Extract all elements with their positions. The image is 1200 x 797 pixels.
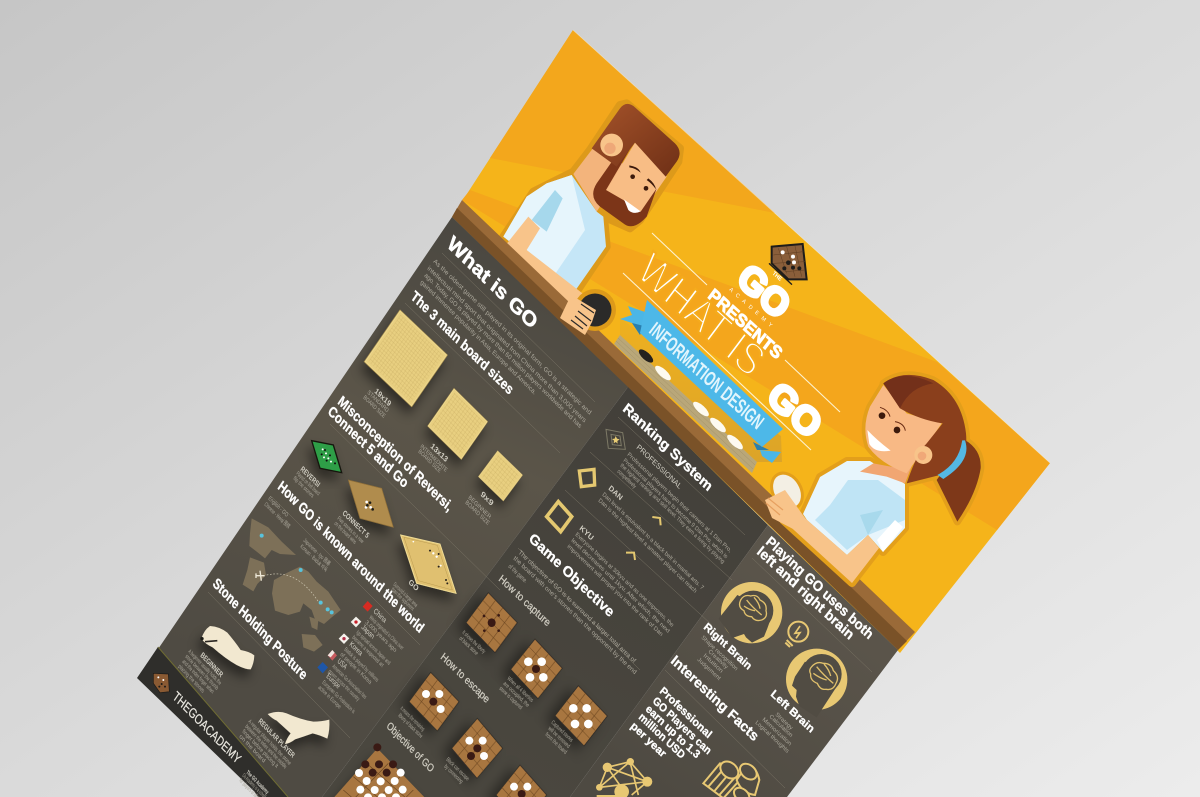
board descriptions: flip the stones	[292, 476, 315, 500]
woman shirt	[803, 461, 905, 555]
escape board 3	[496, 765, 547, 797]
posture labels: placing the stones	[177, 664, 205, 695]
country list: 3,000 years ago	[364, 620, 397, 654]
19x19 board	[364, 310, 447, 407]
map language labels: English - GO	[267, 496, 289, 519]
how go is known heading: How GO is known around the world	[275, 477, 427, 636]
board sizes heading: The 3 main board sizes	[408, 287, 517, 398]
country list: Igo spread across Japan and	[355, 630, 391, 667]
map language labels: Korean - Baduk 바둑	[299, 542, 329, 574]
the: THE	[771, 271, 783, 283]
game objective paragraph: of the game.	[507, 563, 528, 585]
dan icon	[579, 469, 595, 487]
what is go paragraph: intellectual mind sport that originated from China more than 3,000 years	[426, 265, 587, 424]
woman ear	[914, 446, 932, 464]
board descriptions: Five stones in a row	[336, 516, 365, 546]
9x9 board	[478, 451, 523, 501]
black stone and man's hand	[560, 289, 616, 335]
game objective paragraph: The objective of GO is to surround a larger total area of	[517, 549, 637, 665]
posture labels: stone between the thumb	[184, 654, 219, 692]
brain icons	[719, 582, 847, 717]
ranking text: Dan level is equivalent to a black belt in martial arts. 7	[601, 492, 704, 592]
ranking text: DAN	[607, 483, 624, 502]
reversi board	[312, 441, 342, 473]
how to capture heading: How to capture	[496, 574, 552, 629]
mini board captions: liberty of black stone	[397, 713, 423, 740]
man eyes and brows	[629, 165, 656, 191]
ranking text: KYU	[578, 523, 595, 542]
misconception heading: Misconception of Reversi,	[335, 392, 456, 515]
playing go heading: left and right brain	[754, 543, 858, 643]
playing go heading: Playing GO uses both	[763, 533, 877, 642]
mini board captions: It shows the liberty	[461, 630, 486, 655]
woman neck	[860, 453, 917, 483]
footer logo	[153, 673, 169, 693]
board labels: STANDARD	[366, 390, 389, 414]
board descriptions: than the opponent	[390, 587, 415, 613]
board labels: INTERMEDIATE	[419, 444, 448, 474]
brain labels	[696, 621, 817, 755]
interesting fact text: million USD	[636, 711, 687, 762]
board labels: 13x13	[429, 441, 450, 464]
mini board captions: Black can escape	[445, 757, 470, 783]
regular player hand	[268, 712, 329, 744]
board labels: BOARD SIZE	[464, 500, 490, 527]
brain labels: Shape recognition	[700, 635, 739, 672]
banner right tail	[760, 450, 781, 463]
posture hands	[200, 626, 329, 744]
world map	[243, 518, 373, 673]
ranking text	[566, 442, 733, 638]
panel: footer	[137, 647, 288, 797]
title rules	[623, 233, 840, 450]
what is go paragraph: As the oldest game still played in its original form, GO is a strategic and	[432, 258, 593, 417]
reversi, connect 5 and go boards	[312, 441, 456, 593]
posture labels: REGULAR PLAYER	[257, 716, 297, 760]
board labels: 19x19	[373, 386, 393, 408]
objective of go board	[320, 743, 440, 797]
man neck	[573, 143, 627, 212]
woman hair band	[940, 442, 965, 477]
interesting facts heading: Interesting Facts	[668, 652, 762, 744]
posture labels: A beginner usually holds the	[187, 649, 222, 687]
interesting fact text: per year	[628, 720, 669, 761]
title block	[623, 233, 840, 450]
banner: information design	[620, 300, 783, 463]
country list: Europe	[325, 671, 342, 691]
ranking text: improvement will propel you into the rank of Dan	[566, 544, 664, 638]
country list: became a respected art	[351, 635, 384, 669]
ranking text: Dan is the highest level a amateur player can reach	[597, 498, 698, 595]
stones on board	[637, 347, 745, 452]
woman halo	[783, 375, 981, 583]
posture labels: A regular player holds the stone	[247, 719, 292, 767]
panel: right column	[570, 525, 898, 797]
how to escape heading: How to escape	[438, 651, 492, 706]
what is go paragraph: gained immense popularity in Asia, Europe and America.	[419, 279, 537, 397]
brain labels: Intuition	[702, 653, 724, 675]
brain labels: Judgement	[696, 657, 722, 682]
interesting fact text: earn up to 1.3	[643, 703, 702, 761]
board labels: BOARD SIZE	[362, 395, 386, 420]
country list: Japan	[360, 622, 376, 641]
footer brand	[153, 673, 270, 797]
country list: grown across the country	[327, 669, 360, 703]
country list: China	[372, 606, 389, 625]
go: GO	[760, 374, 829, 447]
network icon	[596, 758, 652, 797]
mini board captions: will be removed	[546, 725, 571, 750]
map language labels	[263, 496, 332, 574]
capture board 1	[466, 593, 517, 653]
mini board captions: are occupied, the	[502, 681, 530, 709]
man shirt	[503, 175, 606, 293]
mini board captions	[397, 630, 574, 785]
man hair	[592, 104, 680, 177]
posture labels: finger before placing it	[241, 729, 279, 770]
panel: middle column	[322, 387, 768, 797]
board labels: 9x9	[479, 489, 495, 508]
country list: Baduk is played by millions	[343, 647, 379, 684]
game objective paragraph: the board with one's stones than the opponent by the end	[512, 555, 638, 677]
posture labels: BEGINNER	[199, 650, 225, 680]
board descriptions	[292, 464, 421, 613]
mini board captions: When all 4 liberties	[506, 676, 534, 704]
country list: European Go Federation is	[321, 680, 356, 715]
board sizes boards	[364, 310, 523, 501]
board descriptions: REVERSI	[299, 464, 322, 489]
board labels: BOARD SIZE	[417, 449, 442, 475]
mini board captions: from the board	[544, 732, 568, 756]
connect 5 board	[348, 480, 393, 527]
mini board captions: by connecting	[443, 764, 464, 785]
stone holding posture heading: Stone Holding Posture	[210, 574, 310, 683]
board on table and back panel	[614, 318, 782, 473]
ranking text: level decreases until 1kyu. After which, the next	[570, 538, 671, 635]
posture labels: between the index and the middle	[244, 724, 287, 771]
board descriptions: CONNECT 5	[341, 508, 371, 540]
right brain icon	[719, 582, 782, 643]
man beard	[593, 143, 657, 226]
mini board captions: It means the remaining	[399, 706, 425, 733]
go academy: GO	[730, 256, 798, 327]
map route	[267, 574, 318, 602]
chevrons	[626, 517, 661, 560]
panel: left column	[137, 217, 628, 797]
country list: American Go Association has	[331, 664, 367, 701]
footer note	[238, 770, 270, 797]
posture labels	[177, 649, 297, 771]
brain labels: Calculation	[768, 714, 793, 739]
escape board 1	[409, 672, 459, 731]
interesting fact text	[628, 685, 714, 762]
ranking system heading: Ranking System	[620, 399, 716, 494]
white stone and woman's hand	[765, 468, 809, 530]
what is: WHAT IS	[629, 244, 774, 387]
brain labels: Left Brain	[768, 688, 817, 736]
woman smile	[867, 430, 891, 451]
map markers	[260, 534, 334, 614]
man arm	[502, 217, 587, 313]
kyu icon	[547, 502, 572, 532]
ranking text: Professional players have to become 9 Dan Pro, which is	[622, 458, 728, 560]
coins icon	[703, 758, 760, 797]
capture board 2	[511, 639, 562, 699]
objective of go heading: Objective of GO	[384, 720, 436, 775]
poster top edge highlight	[573, 30, 1050, 463]
board descriptions: Surround a larger area	[392, 582, 418, 609]
man ear	[600, 134, 623, 156]
what is go paragraph: ago. Today, GO is played by more than 60 million players worldwide and has	[423, 272, 583, 430]
ranking text: Professional players begin their careers at 1 Dan Pro,	[626, 452, 733, 555]
brain labels: Strategy	[774, 712, 794, 732]
country list: active in Europe	[317, 685, 342, 711]
woman face	[865, 385, 942, 473]
posture labels: on the board	[238, 734, 266, 765]
woman ponytail	[937, 440, 981, 522]
man face	[607, 143, 667, 215]
woman hair	[883, 375, 966, 483]
plane icon	[256, 571, 265, 581]
presents: PRESENTS	[705, 285, 786, 363]
ranking text: the highest ranking and skill level. They earn a living by playing	[619, 463, 725, 565]
banner text: INFORMATION DESIGN	[645, 318, 767, 434]
mini board captions: Captured stones	[550, 720, 574, 744]
escape board 2	[452, 718, 503, 778]
bulb icon	[785, 622, 808, 647]
country list: of people in Korea	[339, 652, 373, 687]
board descriptions: Played on 8x8 board	[295, 471, 320, 497]
13x13 board	[428, 388, 488, 459]
board descriptions: on the board wins	[333, 521, 357, 546]
footer wordmark: THEGOACADEMY	[170, 688, 244, 767]
country list: Weiqi originated in China over	[368, 615, 404, 652]
ranking text: Everyone begins at 30kyu and as one improves, the	[574, 532, 675, 629]
ranking icons	[547, 429, 661, 560]
brain labels: Creativity	[707, 649, 729, 671]
panel: yellow header	[452, 30, 1050, 653]
professional icon	[606, 429, 625, 449]
woman eyes	[879, 407, 905, 433]
wood table strip	[452, 200, 915, 650]
board labels	[362, 386, 495, 527]
map language labels: Japanese - Igo 囲碁	[302, 536, 332, 568]
man illustration	[502, 103, 680, 313]
academy: ACADEMY	[728, 287, 773, 329]
game objective heading: Game Objective	[526, 529, 618, 620]
misconception heading: Connect 5 and Go	[325, 402, 411, 491]
woman arm	[783, 508, 879, 583]
interesting fact text: GO Players can	[650, 695, 714, 758]
country list	[317, 606, 404, 715]
beginner hand	[200, 626, 254, 669]
left brain icon	[786, 649, 847, 717]
posture labels: and the index finger when	[181, 659, 215, 696]
ranking text: competitively	[616, 469, 637, 490]
country list: USA	[336, 656, 349, 671]
capture board 3	[555, 686, 607, 746]
man smile	[624, 199, 641, 213]
board descriptions: GO	[407, 577, 421, 593]
ranking text: PROFESSIONAL	[635, 442, 684, 491]
brain labels: Right Brain	[701, 621, 754, 673]
mini board captions: stone is captured	[498, 686, 523, 711]
flags	[317, 601, 373, 673]
banner left tail	[620, 306, 645, 335]
woman illustration	[765, 375, 981, 583]
mini boards	[409, 593, 607, 797]
interesting fact text: Professional	[657, 685, 714, 741]
brain labels: Logical thoughts	[754, 720, 790, 755]
country list: Korea	[348, 639, 365, 658]
what is go heading: What is GO	[443, 232, 541, 334]
mini board captions: of black stone	[458, 636, 479, 657]
brain labels: Memorization	[761, 717, 792, 747]
logo	[769, 244, 807, 285]
map language labels: Chinese - Weiqi 围棋	[263, 500, 292, 531]
board labels: BEGINNER	[467, 495, 492, 521]
go board	[401, 535, 456, 593]
